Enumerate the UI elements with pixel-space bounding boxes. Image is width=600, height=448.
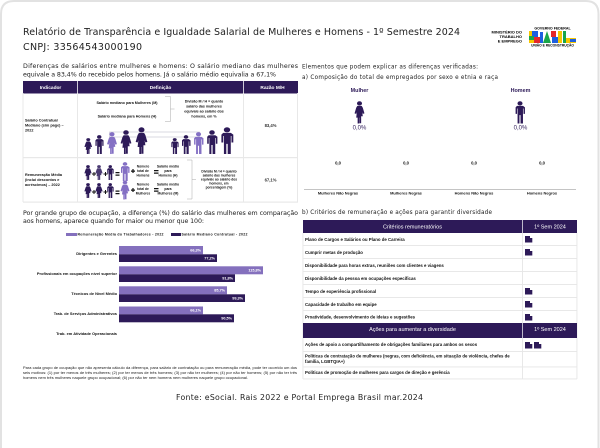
criteria rows: Proatividade, desenvolvimento de ideias e sugestões xyxy=(305,314,416,319)
footnote: Para cada grupo de ocupação que não apresenta cálculo da diferença, para salário de contratação ou para remuneração média, pode ter ocorrido um dos xyxy=(23,365,297,370)
man figure: 0,0% xyxy=(514,126,528,132)
intro text: salary differences: Diferenças de salários entre mulheres e homens: O salário mediano das mulheres xyxy=(23,62,298,70)
table header: Definição xyxy=(150,85,171,91)
criteria rows: Plano de Cargos e Salários ou Plano de Carreira xyxy=(305,237,405,242)
woman figure: 0,0% xyxy=(353,126,367,132)
header: remuneration criteria: Critérios remuneratórios xyxy=(383,225,442,231)
header: diversity actions: Ações para aumentar a diversidade xyxy=(369,327,456,333)
bar values: 66,1% xyxy=(190,308,202,312)
logo: ministry and government: MINISTÉRIO DO xyxy=(492,29,522,34)
empty composition chart xyxy=(304,160,576,196)
row: average pay: Número xyxy=(137,164,149,168)
chart legend xyxy=(66,233,248,237)
bar values: 85,7% xyxy=(214,288,226,292)
row: average pay: Mulheres (M) xyxy=(158,192,178,196)
category labels: Dirigentes e Gerentes xyxy=(76,251,118,256)
row: average pay: porcentagem (%) xyxy=(206,186,232,190)
intro text: salary differences xyxy=(23,62,298,78)
panel: indicator table xyxy=(22,81,298,203)
header: remuneration criteria xyxy=(303,220,577,233)
chart legend: Remuneração Média do Trabalhadores - 2022 xyxy=(78,233,164,237)
diversity rows: Políticas de promoção de mulheres para cargos de direção e gerência xyxy=(305,370,450,375)
panel: workforce composition xyxy=(304,88,576,196)
row: median salary: equivale ao salário dos xyxy=(184,110,224,114)
panel: criteria table xyxy=(302,220,577,379)
category labels: Trab. em Atividade Operacionais xyxy=(56,331,118,336)
diversity rows xyxy=(305,342,510,375)
footnote xyxy=(23,365,297,380)
row: average pay: Salário médio xyxy=(157,182,179,186)
category labels: Técnicos de Nível Médio xyxy=(71,291,118,296)
empty composition chart: 0,0 xyxy=(471,160,478,166)
empty composition chart: Homens Não Negros xyxy=(455,190,494,196)
row: median salary xyxy=(25,96,277,132)
row: median salary: Divisão M / H = quanto xyxy=(185,100,224,104)
category labels: Profissionais em ocupações nível superior xyxy=(37,271,117,276)
icons: people comparison xyxy=(84,127,233,154)
logo: ministry and government: E EMPREGO xyxy=(498,38,522,44)
empty composition chart: Mulheres Não Negras xyxy=(318,190,359,196)
criteria rows: Tempo de experiência profissional xyxy=(305,289,376,294)
category labels xyxy=(37,251,118,336)
icons: action marks xyxy=(525,342,541,348)
source: Fonte: eSocial. Rais 2022 e Portal Emprega Brasil mar.2024 xyxy=(176,393,423,402)
row: average pay: total de xyxy=(137,187,149,191)
logo: ministry and government xyxy=(492,26,576,48)
empty composition chart: Homens Negros xyxy=(527,190,558,196)
bar values: 66,3% xyxy=(190,248,202,252)
title xyxy=(23,27,460,53)
row: average pay: (inclui descontos e xyxy=(25,178,59,182)
row: average pay: Mulheres xyxy=(136,192,150,196)
category labels: Trab. de Serviços Administrativos xyxy=(54,311,118,316)
empty composition chart: 0,0 xyxy=(403,160,410,166)
man figure: Homem xyxy=(511,88,531,94)
title: Relatório de Transparência e Igualdade Salarial de Mulheres e Homens - 1º Semestre 2024 xyxy=(23,27,460,38)
row: average pay: para xyxy=(164,169,172,173)
right heading: explanatory elements: a) Composição do total de empregados por sexo e etnia e raça xyxy=(302,75,498,81)
row: average pay xyxy=(25,160,277,199)
row: average pay: 67,1% xyxy=(265,178,277,182)
logo: ministry and government: UNIÃO E RECONSTRUÇÃO xyxy=(531,43,574,48)
bar values: 91,8% xyxy=(222,276,234,280)
bar values: 77,2% xyxy=(204,256,216,260)
empty composition chart: 0,0 xyxy=(539,160,546,166)
row: median salary: Mediano (sim page) – xyxy=(25,124,64,128)
row: average pay: Número xyxy=(137,182,149,186)
intro text: salary differences: equivale a 83,4% do recebido pelos homens. Já o salário médio equivalia a 67,1% xyxy=(23,70,276,78)
bars xyxy=(119,246,263,322)
row: average pay: homens, em xyxy=(209,182,229,186)
woman figure xyxy=(351,88,369,132)
icons: criteria marks xyxy=(525,236,532,320)
footnote: homens nem três mulheres naquele grupo ocupacional; (6) por não ter nem homens nem mulheres naquele grupo ocupacional. xyxy=(23,375,248,380)
row: median salary: salário das mulheres xyxy=(186,104,222,108)
row: average pay: Homens xyxy=(136,174,150,178)
row: average pay: Homens (H) xyxy=(158,174,178,178)
heading: criteria: b) Critérios de remuneração e ações para garantir diversidade xyxy=(302,209,492,216)
woman figure: Mulher xyxy=(351,88,369,94)
row: median salary: Salário mediano para Mulheres (M) xyxy=(96,101,158,105)
heading: occupation groups: aos homens, aparece quando for maior ou menor que 100: xyxy=(23,218,204,225)
header: remuneration criteria: 1º Sem 2024 xyxy=(534,224,566,231)
bar values: 90,5% xyxy=(221,316,233,320)
table header: Razão M/H xyxy=(260,85,285,91)
criteria rows: Cumprir metas de produção xyxy=(305,250,363,255)
title: CNPJ: 33564543000190 xyxy=(23,42,142,53)
man figure xyxy=(511,88,531,132)
header: diversity actions xyxy=(303,323,577,338)
empty composition chart: Mulheres Negras xyxy=(390,190,423,196)
bar values: 99,3% xyxy=(232,296,244,300)
table header: Indicador xyxy=(40,85,61,91)
diversity rows: família, LGBTQIA+) xyxy=(305,359,345,364)
logo: ministry and government: GOVERNO FEDERAL xyxy=(534,26,571,30)
bar values: 115,8% xyxy=(248,268,262,272)
row: average pay: Remuneração Média xyxy=(25,173,63,177)
heading: occupation groups: Por grande grupo de ocupação, a diferença (%) do salário das mulheres em comparação xyxy=(23,209,298,217)
row: average pay: para xyxy=(164,187,172,191)
row: median salary: Salário mediana para Homens (H) xyxy=(98,114,157,118)
row: average pay: acréscimos) – 2022 xyxy=(25,183,60,187)
diversity rows: Ações de apoio a compartilhamento de obrigações familiares para ambos os sexos xyxy=(305,342,478,347)
header: diversity actions: 1º Sem 2024 xyxy=(534,326,566,333)
criteria rows xyxy=(305,237,444,319)
criteria rows: Disponibilidade da pessoa em ocupações específicas xyxy=(305,276,416,281)
heading: occupation groups xyxy=(23,209,298,225)
row: average pay: Divisão M / H = quanto xyxy=(201,170,237,174)
right heading: explanatory elements: Elementos que podem explicar as diferenças verificadas: xyxy=(302,64,478,70)
row: average pay: equivale ao salário dos xyxy=(201,178,237,182)
empty composition chart: 0,0 xyxy=(335,160,342,166)
icons: average pay equation xyxy=(84,162,158,200)
row: average pay: Salário médio xyxy=(157,164,179,168)
row: median salary: 2022 xyxy=(25,128,33,132)
row: median salary: 83,4% xyxy=(265,123,277,128)
row: median salary: homens, em % xyxy=(191,114,217,118)
row: median salary: Salário Contratual xyxy=(25,118,58,122)
diversity rows: Políticas de contratação de mulheres (negras, com deficiência, em situação de violência, chefes de xyxy=(305,354,510,358)
row: average pay: salário das mulheres xyxy=(203,174,236,178)
bar values xyxy=(190,248,262,320)
right heading: explanatory elements xyxy=(302,64,498,81)
table header xyxy=(23,81,298,94)
row: average pay: total de xyxy=(137,169,149,173)
criteria rows: Disponibilidade para horas extras, reuniões com clientes e viagens xyxy=(305,263,444,268)
footnote: seis motivos: (1) por ter menos de três mulheres; (2) por ter menos de três homens; (3) por não ter mulheres; (4) por não ter homens; (5) por não ter três xyxy=(23,370,297,375)
logo: ministry and government: TRABALHO xyxy=(500,34,522,39)
bar chart: occupation groups xyxy=(37,233,263,336)
chart legend: Salário Mediano Contratual - 2022 xyxy=(182,233,248,237)
criteria rows: Capacidade de trabalho em equipe xyxy=(305,302,377,307)
